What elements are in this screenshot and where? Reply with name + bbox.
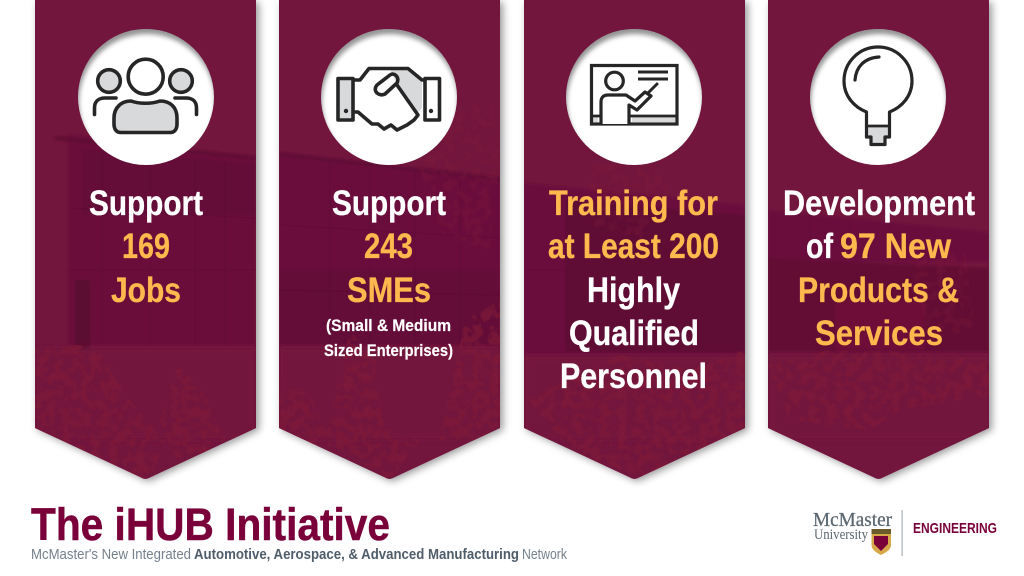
heading: support 169 jobs	[89, 184, 203, 310]
icon: crest	[872, 529, 891, 555]
heading: support 169 jobs: 169	[122, 227, 170, 266]
heading: development of 97 new products and services	[783, 184, 975, 353]
heading: support 169 jobs: Jobs	[111, 271, 181, 310]
text: sme definition: (Small & Medium	[326, 316, 451, 335]
heading: support 243 smes: SMEs	[347, 271, 431, 310]
heading: development of 97 new products and services: Development	[783, 184, 975, 223]
logo: mcmaster university engineering: McMaster	[813, 509, 892, 531]
subtitle: Automotive, Aerospace, & Advanced Manufacturing	[194, 546, 519, 563]
text: sme definition	[324, 316, 453, 360]
heading: training for at least 200 highly qualified personnel	[548, 184, 719, 396]
heading: training for at least 200 highly qualified personnel: Qualified	[569, 314, 699, 353]
subtitle	[31, 546, 567, 563]
tinted building photo background	[35, 134, 989, 479]
title: The iHUB Initiative	[31, 499, 390, 550]
heading: training for at least 200 highly qualified personnel: Highly	[587, 271, 680, 310]
heading: training for at least 200 highly qualified personnel: at Least 200	[548, 227, 719, 266]
logo: mcmaster university engineering: ENGINEERING	[913, 520, 997, 537]
banner shapes with shadow	[35, 0, 989, 479]
logo: mcmaster university engineering	[813, 509, 997, 556]
panel: training	[548, 23, 719, 396]
icon: light bulb in white circle	[810, 29, 946, 165]
heading: support 243 smes: Support	[332, 184, 446, 223]
icon: people in white circle	[78, 29, 214, 165]
logo: mcmaster university engineering: University	[814, 527, 868, 543]
heading: training for at least 200 highly qualified personnel: Personnel	[560, 357, 707, 396]
subtitle: McMaster's New Integrated	[31, 546, 191, 563]
heading: development of 97 new products and services: 97 New	[840, 227, 952, 266]
icon: teacher at board in white circle	[566, 29, 702, 165]
heading: development of 97 new products and services: Services	[815, 314, 943, 353]
text: sme definition: Sized Enterprises)	[324, 341, 453, 360]
heading: support 169 jobs: Support	[89, 184, 203, 223]
panel: products	[783, 23, 975, 353]
subtitle: Network	[522, 546, 567, 563]
icon: handshake in white circle	[321, 29, 457, 165]
panel: smes	[321, 29, 457, 360]
heading: development of 97 new products and services: of	[806, 227, 833, 266]
panel: jobs	[78, 29, 214, 302]
heading: support 243 smes	[332, 184, 446, 310]
heading: training for at least 200 highly qualified personnel: Training for	[549, 184, 718, 223]
heading: support 243 smes: 243	[364, 227, 413, 266]
heading: development of 97 new products and services: Products &	[798, 271, 959, 310]
